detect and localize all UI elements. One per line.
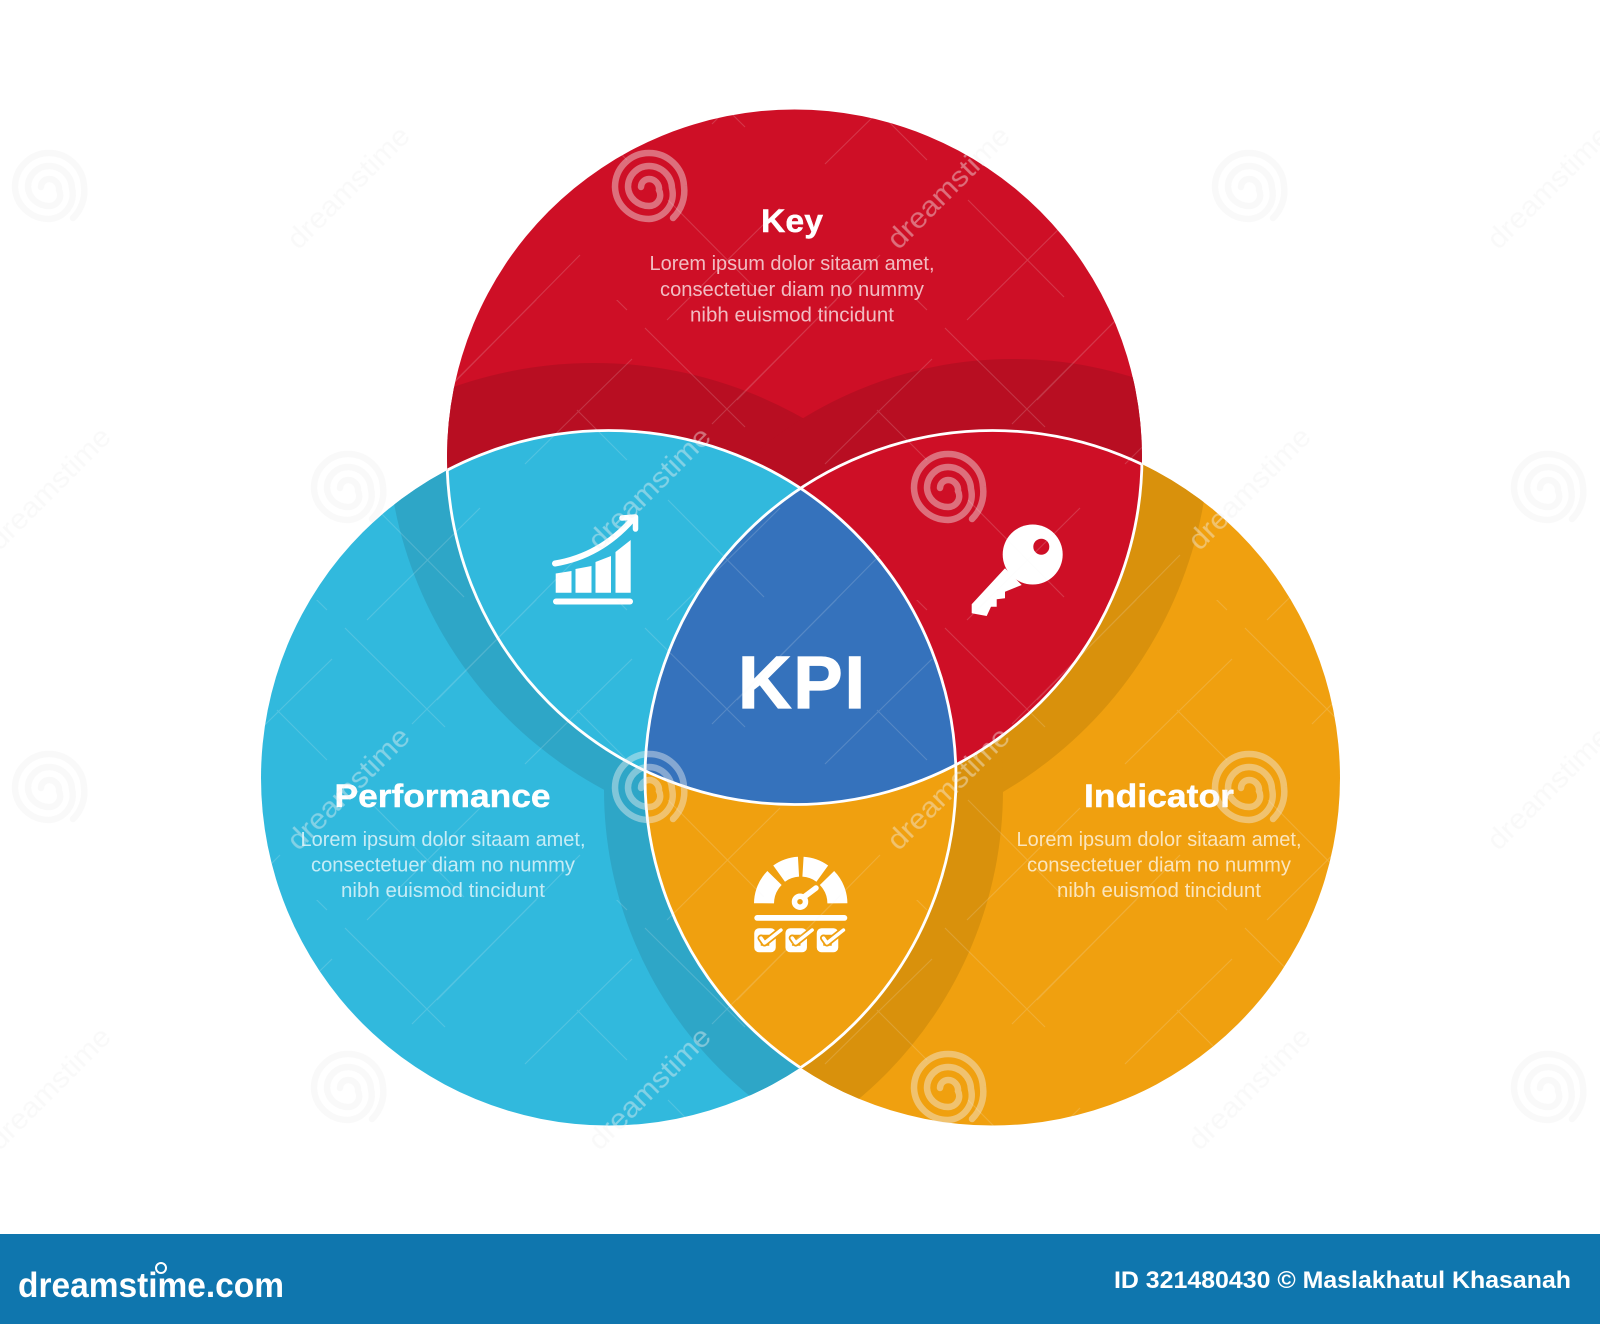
text block: Performance description: Lorem ipsum dolor sitaam amet, [300,829,586,851]
lens: performance and indicator overlap [646,767,954,1066]
watermark: rotated dreamstime wordmarks: dreamstime [582,421,718,557]
watermark: rotated dreamstime wordmarks: dreamstime [881,721,1017,857]
watermark: rotated dreamstime wordmarks: dreamstime [881,120,1017,256]
watermark: rotated dreamstime wordmarks [0,120,1600,1157]
watermark: rotated dreamstime wordmarks: dreamstime [281,721,417,857]
heading: Key: Key [761,203,823,239]
icon: growth bar chart [553,517,636,604]
panel: indicator circle with shadows [800,464,1340,1126]
heading: Indicator: Indicator [1084,778,1234,814]
panel: performance circle with shadows [261,470,800,1126]
center label: KPI: KPI [738,641,865,724]
text block: Key description [650,253,934,326]
watermark: rotated dreamstime wordmarks: dreamstime [1182,421,1318,557]
text block: Indicator description: consectetuer diam no nummy [1027,854,1291,876]
text block: Indicator description: Lorem ipsum dolor sitaam amet, [1016,829,1302,851]
text block: Key description: consectetuer diam no nummy [660,279,924,301]
text block: Key description: nibh euismod tincidunt [690,304,894,326]
lens: performance and key overlap [448,432,798,769]
icon: gauge with checkboxes [754,867,847,949]
footer credit: ID 321480430 © Maslakhatul Khasanah [1114,1267,1571,1294]
text block: Indicator description: nibh euismod tincidunt [1057,880,1261,902]
text block: Key description: Lorem ipsum dolor sitaam amet, [650,253,934,275]
footer logo: dreamstime.com: dreamstime.com [18,1266,284,1305]
watermark: rotated dreamstime wordmarks: dreamstime [582,1021,718,1157]
text block: Indicator description [1016,829,1302,902]
panel: key circle with shadows [447,110,1142,487]
watermark: rotated dreamstime wordmarks: dreamstime [1182,1021,1318,1157]
footer bar [0,1234,1600,1324]
text block: Performance description: consectetuer diam no nummy [311,854,575,876]
text block: Performance description: nibh euismod tincidunt [341,880,545,902]
text block: Performance description [300,829,586,902]
white outlines of overlaps [446,429,1144,1068]
lens: key and indicator overlap [803,432,1140,762]
watermark: spirals [15,153,1583,1120]
watermark: lattice lines [240,100,1370,1140]
icon: key [972,524,1063,616]
lens: central KPI region [646,490,954,804]
watermark: rotated dreamstime wordmarks: dreamstime [281,120,417,256]
heading: Performance: Performance [334,778,550,814]
